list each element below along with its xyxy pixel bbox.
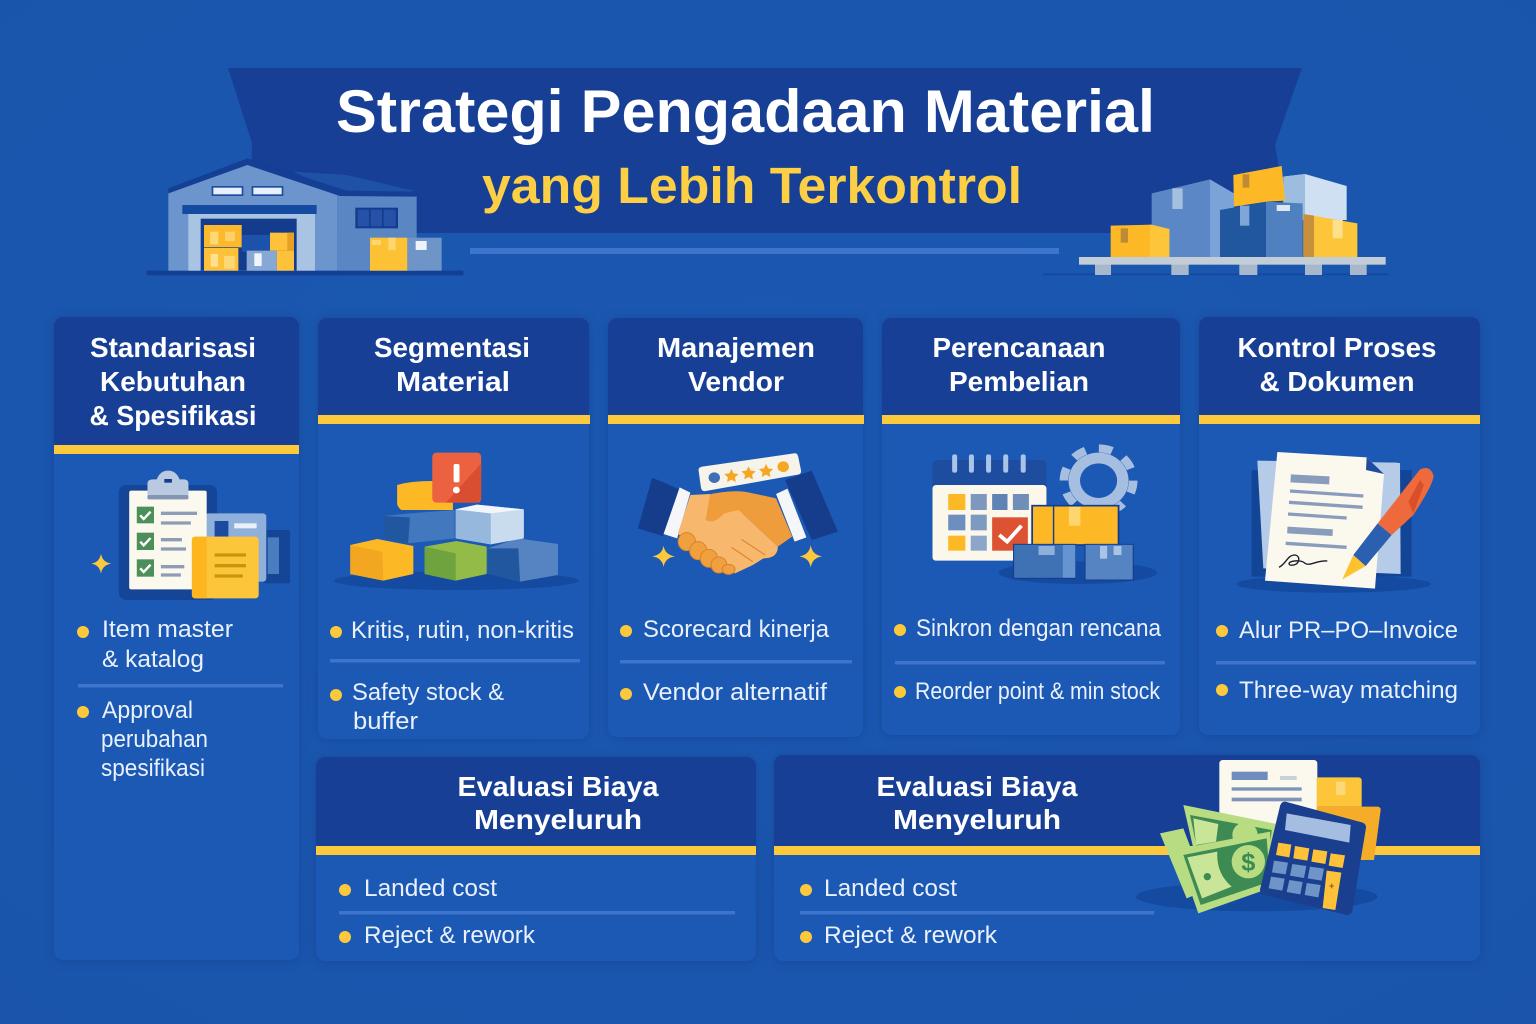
panel: Segmentasi Material [318, 318, 590, 739]
bullet list: Item master [102, 616, 233, 643]
bullet list [894, 615, 1165, 705]
heading: & Dokumen [1260, 366, 1414, 397]
icon: calendar, gear and boxes [932, 448, 1157, 584]
bullet list [77, 616, 283, 782]
bullet list: Scorecard kinerja [643, 616, 830, 643]
title banner [228, 68, 1302, 254]
bullet list: Approval [102, 697, 193, 724]
icon: boxes on pallet [1043, 166, 1388, 275]
icon: money and calculator [1136, 760, 1381, 913]
bullet list [1216, 617, 1476, 704]
bullet list: Landed cost [824, 875, 957, 902]
bullet list: Kritis, rutin, non-kritis [351, 617, 574, 644]
icon: clipboard and folder [91, 471, 290, 600]
heading: Menyeluruh [893, 804, 1061, 835]
bullet list [800, 875, 1154, 949]
heading: Evaluasi Biaya [458, 771, 659, 802]
heading: Perencanaan [932, 332, 1106, 363]
bullet list: Safety stock & [352, 679, 504, 706]
bullet list: perubahan [101, 726, 208, 753]
bullet list [330, 617, 580, 735]
heading: Material [396, 366, 510, 397]
heading: Menyeluruh [474, 804, 642, 835]
heading: Evaluasi Biaya [876, 771, 1078, 802]
icon: material blocks [334, 453, 579, 590]
panel: Standarisasi Kebutuhan & Spesifikasi [54, 317, 299, 960]
bullet list: Alur PR–PO–Invoice [1239, 617, 1458, 644]
heading [876, 771, 1078, 835]
heading [657, 332, 815, 397]
panel: Perencanaan Pembelian [882, 318, 1180, 735]
bullet list [339, 875, 735, 949]
panel: Manajemen Vendor [608, 318, 864, 737]
icon: signed document and pen [1236, 452, 1433, 593]
bullet list: & katalog [102, 646, 204, 673]
heading [458, 771, 659, 835]
heading: Pembelian [949, 366, 1089, 397]
heading: Kebutuhan [100, 366, 246, 397]
heading: & Spesifikasi [90, 400, 256, 431]
bullet list [620, 616, 852, 706]
bullet list: Reorder point & min stock [915, 678, 1161, 705]
heading [90, 332, 256, 431]
panel: Evaluasi Biaya Menyeluruh (right) [774, 755, 1480, 961]
icon: money and calculator: $ [1241, 849, 1255, 877]
panel: Kontrol Proses & Dokumen [1199, 317, 1480, 735]
title [336, 78, 1155, 214]
bullet list: spesifikasi [101, 755, 205, 782]
bullet list: Three-way matching [1239, 677, 1458, 704]
bullet list: Reject & rework [364, 922, 536, 949]
bullet list: buffer [353, 708, 418, 735]
bullet list: Reject & rework [824, 922, 998, 949]
panel: Evaluasi Biaya Menyeluruh (left) [316, 757, 756, 961]
heading: Vendor [688, 366, 784, 397]
icon: handshake with rating [638, 453, 838, 574]
bullet list: Vendor alternatif [643, 679, 827, 706]
heading: Segmentasi [374, 332, 530, 363]
icon: warehouse [147, 158, 463, 275]
title: yang Lebih Terkontrol [482, 157, 1022, 214]
heading [1238, 332, 1436, 397]
bullet list: Sinkron dengan rencana [916, 615, 1162, 642]
heading [932, 332, 1106, 397]
heading: Kontrol Proses [1238, 332, 1436, 363]
heading: Standarisasi [90, 332, 256, 363]
heading [374, 332, 530, 397]
bullet list: Landed cost [364, 875, 497, 902]
title: Strategi Pengadaan Material [336, 78, 1155, 145]
heading: Manajemen [657, 332, 815, 363]
